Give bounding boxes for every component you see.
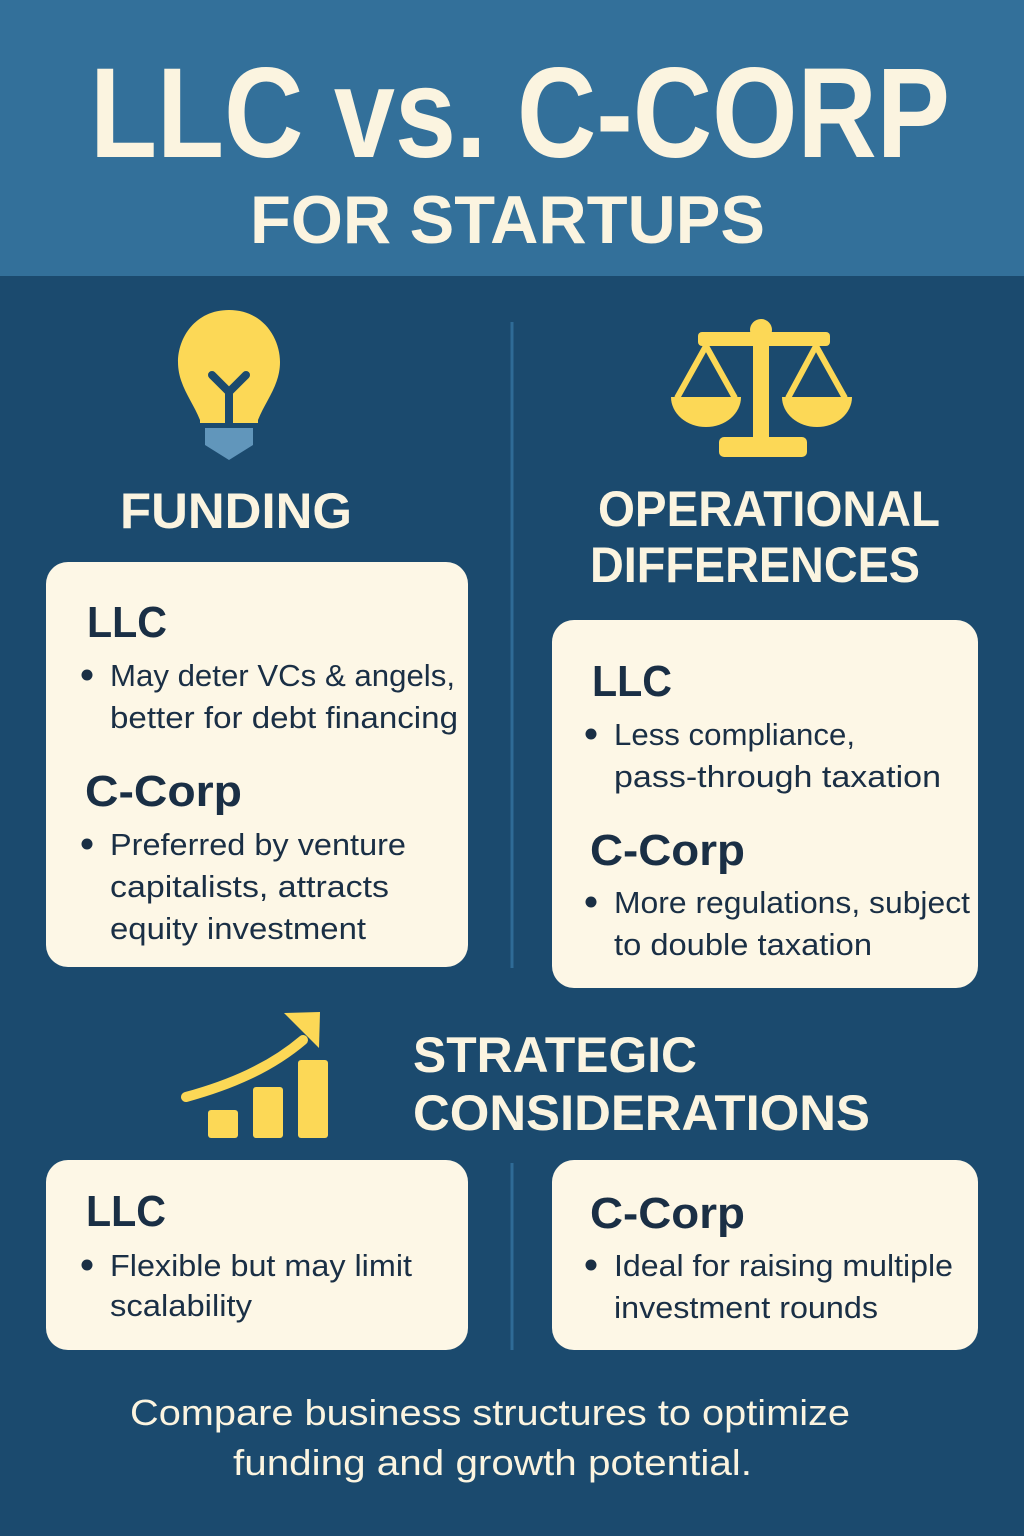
panel: strategic C-Corp card: C-Corp (590, 1189, 745, 1238)
panel: operational card: pass-through taxation (614, 759, 941, 794)
panel: funding card: May deter VCs & angels, (110, 658, 455, 693)
footer text: funding and growth potential. (233, 1442, 752, 1483)
panel: strategic LLC card: Flexible but may limit (110, 1248, 412, 1283)
icon: growth chart (186, 1012, 328, 1138)
panel: funding card: Preferred by venture (110, 827, 406, 862)
panel: strategic LLC card: LLC (86, 1187, 166, 1236)
panel: funding card: LLC (87, 598, 167, 647)
panel: operational card: to double taxation (614, 927, 872, 962)
header band (0, 0, 1024, 276)
panel: funding card: equity investment (110, 911, 366, 946)
heading: strategic considerations: CONSIDERATIONS (413, 1085, 870, 1141)
icon: light bulb (178, 310, 280, 460)
panel: funding card: capitalists, attracts (110, 869, 389, 904)
panel: operational card: Less compliance, (614, 717, 855, 752)
footer text (130, 1392, 850, 1483)
heading: funding: FUNDING (120, 483, 352, 539)
panel: funding card: better for debt financing (110, 700, 458, 735)
icon: scales (671, 319, 852, 457)
panel: operational card: More regulations, subject (614, 885, 970, 920)
panel: operational card: LLC (592, 657, 672, 706)
heading: strategic considerations (413, 1027, 870, 1141)
panel: strategic C-Corp card: investment rounds (614, 1290, 878, 1325)
panel: strategic C-Corp card: Ideal for raising multiple (614, 1248, 953, 1283)
panel: operational card (552, 620, 978, 988)
panel: funding card (46, 562, 468, 967)
panel: strategic LLC card: scalability (110, 1288, 253, 1323)
heading: operational differences: DIFFERENCES (590, 537, 920, 593)
panel: funding card: C-Corp (85, 767, 242, 816)
heading: operational differences: OPERATIONAL (598, 481, 940, 537)
heading: strategic considerations: STRATEGIC (413, 1027, 697, 1083)
footer text: Compare business structures to optimize (130, 1392, 850, 1433)
subtitle: FOR STARTUPS (250, 182, 765, 258)
panel: operational card: C-Corp (590, 826, 745, 875)
panel: strategic C-Corp card (552, 1160, 978, 1350)
panel: strategic LLC card (46, 1160, 468, 1350)
heading: operational differences (590, 481, 940, 593)
